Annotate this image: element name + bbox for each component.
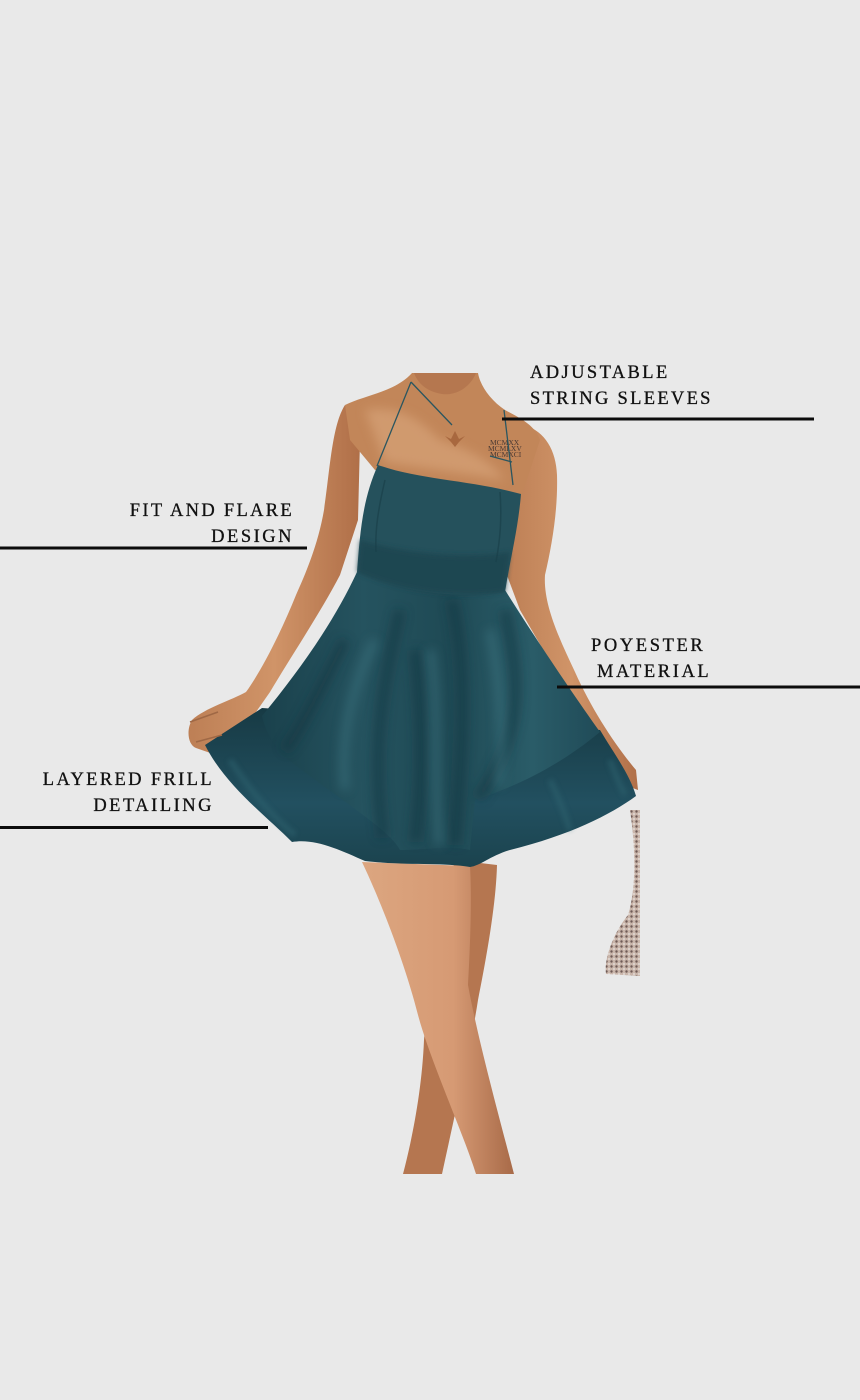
- tattoo: MCMXX: [490, 438, 520, 447]
- front leg: [362, 862, 514, 1174]
- callout: polyester material: MATERIAL: [597, 662, 711, 682]
- necklace pendant: [445, 431, 465, 447]
- callout: fit and flare design: [0, 501, 307, 550]
- bodice: [357, 465, 521, 595]
- bodice seams: [376, 480, 501, 562]
- left arm: [189, 405, 360, 755]
- upper skirt tier: [262, 572, 600, 850]
- callout: layered frill detailing: DETAILING: [93, 796, 214, 816]
- bag: [606, 810, 640, 976]
- hand fingers: [190, 712, 222, 742]
- tattoo: [488, 438, 522, 459]
- torso and chest: [345, 373, 540, 500]
- chest highlight: [365, 409, 505, 480]
- back leg: [403, 860, 497, 1174]
- chin shadow: [414, 373, 476, 394]
- model wearing teal dress: [189, 373, 640, 1174]
- skirt dark folds: [285, 600, 516, 845]
- skirt light folds: [344, 630, 501, 845]
- callout: polyester material: POYESTER: [591, 636, 705, 656]
- right arm: [505, 425, 638, 790]
- callout: layered frill detailing: [0, 770, 268, 829]
- tattoo: MCMXCI: [490, 450, 522, 459]
- callout: polyester material: [557, 636, 860, 688]
- callout: adjustable string sleeves: STRING SLEEVES: [530, 389, 713, 409]
- bodice shading: [357, 540, 510, 595]
- tattoo: MCMLXV: [488, 444, 522, 453]
- callout: fit and flare design: FIT AND FLARE: [130, 501, 294, 521]
- lower skirt tier: [205, 708, 636, 867]
- lower tier folds: [230, 760, 625, 835]
- callout: layered frill detailing: LAYERED FRILL: [43, 770, 214, 790]
- callout: adjustable string sleeves: ADJUSTABLE: [530, 363, 670, 383]
- callout: fit and flare design: DESIGN: [211, 527, 294, 547]
- string straps: [377, 382, 513, 485]
- callout: adjustable string sleeves: [502, 363, 814, 420]
